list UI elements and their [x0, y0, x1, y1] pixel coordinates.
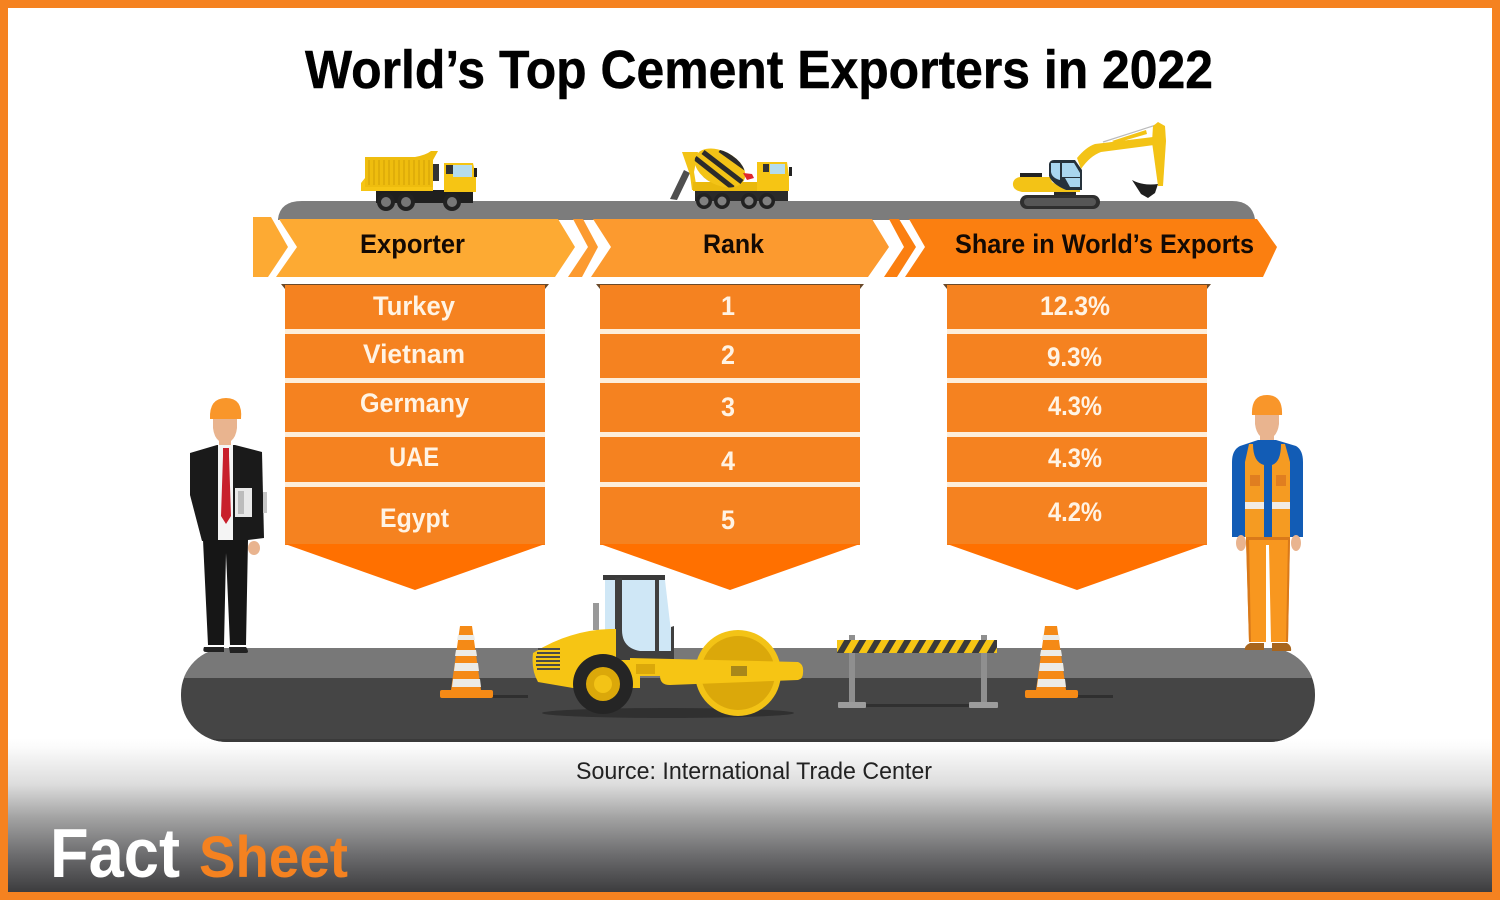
header: share in world's exports: Share in World’s Exports	[955, 229, 1254, 259]
row: 3	[600, 383, 860, 432]
row: 12.3%	[947, 285, 1207, 329]
header: exporter: Exporter	[360, 229, 465, 259]
hard hat	[1252, 395, 1282, 415]
icon: worker	[1232, 395, 1303, 651]
footer gradient band	[8, 738, 1492, 892]
row: 4: 4	[721, 446, 735, 476]
row: Egypt	[285, 487, 545, 545]
arrow tip	[947, 544, 1207, 590]
row: 4.3%: 4.3%	[1048, 391, 1102, 421]
icon: businessman	[190, 398, 267, 653]
hard hat	[210, 398, 241, 419]
trousers	[1246, 537, 1290, 642]
row: UAE	[285, 437, 545, 482]
title: World’s Top Cement Exporters in 2022	[305, 40, 1213, 100]
row: 1: 1	[721, 291, 735, 321]
row: 9.3%	[947, 334, 1207, 378]
jacket	[190, 445, 264, 541]
brand: Fact Sheet: Sheet	[199, 825, 348, 890]
brand: Fact Sheet: Fact	[50, 814, 180, 892]
arrow tip	[285, 544, 545, 590]
row: 5: 5	[721, 505, 735, 535]
header: rank: Rank	[703, 229, 765, 259]
column: share	[943, 284, 1211, 590]
head	[213, 419, 237, 449]
row: Germany	[285, 383, 545, 432]
small chevron 1	[253, 217, 288, 277]
source note: Source: International Trade Center	[576, 758, 932, 785]
hands	[1236, 535, 1246, 551]
row: 4	[600, 437, 860, 482]
arrow tip	[600, 544, 860, 590]
row: Vietnam: Vietnam	[363, 339, 465, 369]
header: exporter	[276, 219, 575, 277]
icon: dump truck	[361, 151, 477, 211]
header: rank	[591, 219, 889, 277]
icon: road barrier	[837, 635, 999, 708]
head	[1255, 415, 1279, 444]
vest	[1245, 444, 1290, 537]
shoes	[203, 647, 248, 653]
row: 9.3%: 9.3%	[1047, 342, 1102, 372]
icon: cement mixer truck	[670, 148, 792, 209]
boots	[1245, 643, 1291, 651]
shirt	[218, 445, 233, 540]
row: 4.2%: 4.2%	[1048, 497, 1102, 527]
icon: traffic cone left	[440, 626, 528, 698]
upper road	[278, 201, 1255, 220]
row: 12.3%: 12.3%	[1040, 291, 1110, 321]
blue shirt	[1232, 440, 1303, 537]
row: 4.3%	[947, 437, 1207, 482]
row: Germany: Germany	[360, 388, 469, 418]
row: Turkey: Turkey	[373, 291, 455, 321]
icon: traffic cone right	[1025, 626, 1113, 698]
small chevron 3	[884, 219, 916, 277]
row: 4.2%	[947, 487, 1207, 545]
row: Turkey	[285, 285, 545, 329]
row: 1	[600, 285, 860, 329]
icon: excavator	[1013, 122, 1166, 209]
row: UAE: UAE	[389, 442, 439, 472]
brand: Fact Sheet	[50, 814, 348, 892]
trousers	[203, 540, 248, 645]
header ribbon	[253, 217, 1277, 277]
row: Vietnam	[285, 334, 545, 378]
row: 2	[600, 334, 860, 378]
row: Egypt: Egypt	[380, 503, 449, 533]
lower road	[181, 648, 1315, 742]
row: 4.3%	[947, 383, 1207, 432]
papers	[263, 492, 267, 513]
row: 3: 3	[721, 392, 735, 422]
header: share in world's exports	[905, 219, 1277, 277]
row: 4.3%: 4.3%	[1048, 443, 1102, 473]
column: rank	[596, 284, 864, 590]
icon: road roller	[533, 575, 803, 718]
small chevron 2	[568, 219, 598, 277]
row: 5	[600, 487, 860, 545]
hand	[248, 541, 260, 555]
row: 2: 2	[721, 340, 735, 370]
column: exporter	[281, 284, 549, 590]
tie	[221, 448, 231, 524]
